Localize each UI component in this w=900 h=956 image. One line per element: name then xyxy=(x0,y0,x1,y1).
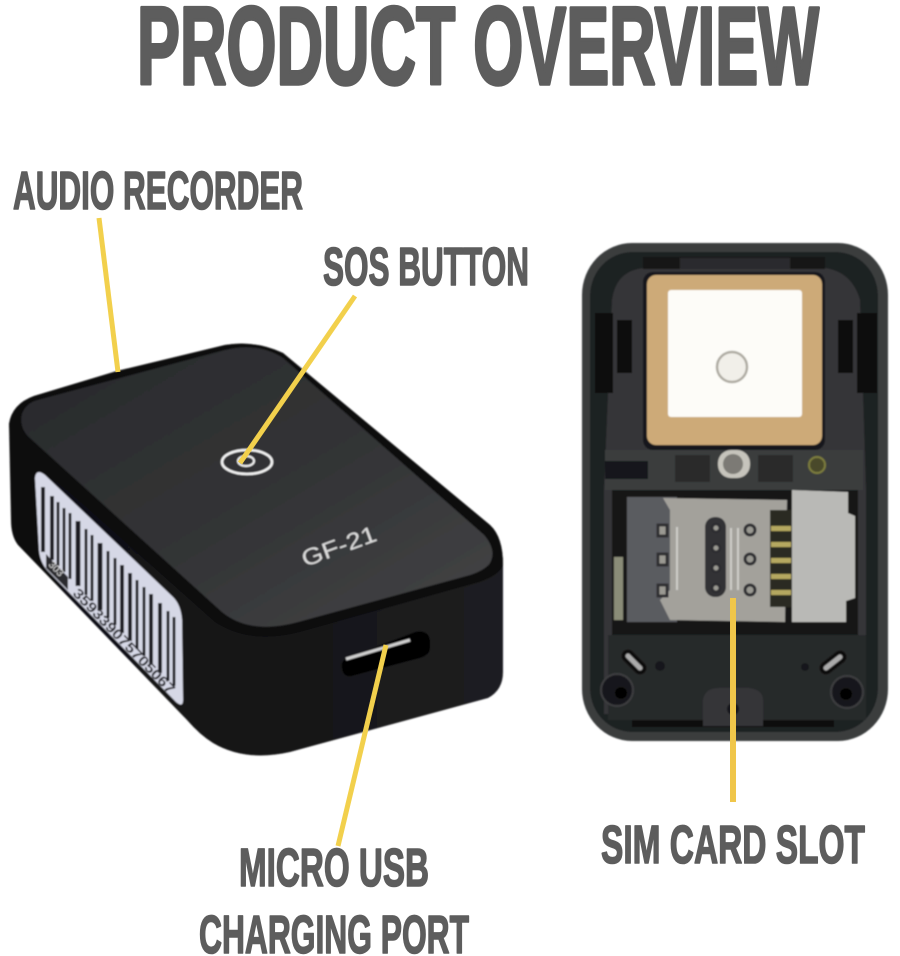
gold contact strip xyxy=(770,510,792,607)
memory slot xyxy=(792,490,855,622)
device top face xyxy=(21,347,492,627)
label: audio recorder: AUDIO RECORDER xyxy=(13,161,303,221)
model text: GF-21 xyxy=(298,521,380,572)
SIM board xyxy=(612,490,858,636)
label: micro USB: MICRO USB xyxy=(239,838,429,898)
contact pins xyxy=(705,517,726,597)
leader line: audio recorder xyxy=(99,218,118,372)
barcode text xyxy=(46,554,179,697)
device interior view xyxy=(582,243,888,741)
leader line: micro USB xyxy=(338,645,386,846)
device rim xyxy=(9,344,503,637)
barcode bars xyxy=(43,487,174,686)
left contact strip xyxy=(614,557,623,620)
shell outer xyxy=(582,243,888,741)
leader line: SIM card slot xyxy=(730,598,736,802)
shell inner xyxy=(590,252,878,732)
device front view xyxy=(9,344,503,755)
GPS antenna xyxy=(643,272,825,450)
device body xyxy=(9,344,503,755)
micro USB port xyxy=(342,631,430,676)
shell floor xyxy=(604,268,866,714)
SIM tray xyxy=(660,498,787,622)
middle button strip xyxy=(605,450,863,490)
center ribs xyxy=(677,527,738,590)
bottom section xyxy=(601,635,866,727)
antenna pin xyxy=(717,352,747,382)
leader line: SOS button xyxy=(240,296,355,463)
barcode label xyxy=(35,472,183,705)
side clips xyxy=(595,313,877,393)
top band xyxy=(643,257,825,269)
label: SOS button: SOS BUTTON xyxy=(323,237,529,297)
barcode text: 303 xyxy=(46,559,66,579)
SOS button icon xyxy=(222,450,272,474)
barcode text: 359339075705067 xyxy=(70,585,179,697)
